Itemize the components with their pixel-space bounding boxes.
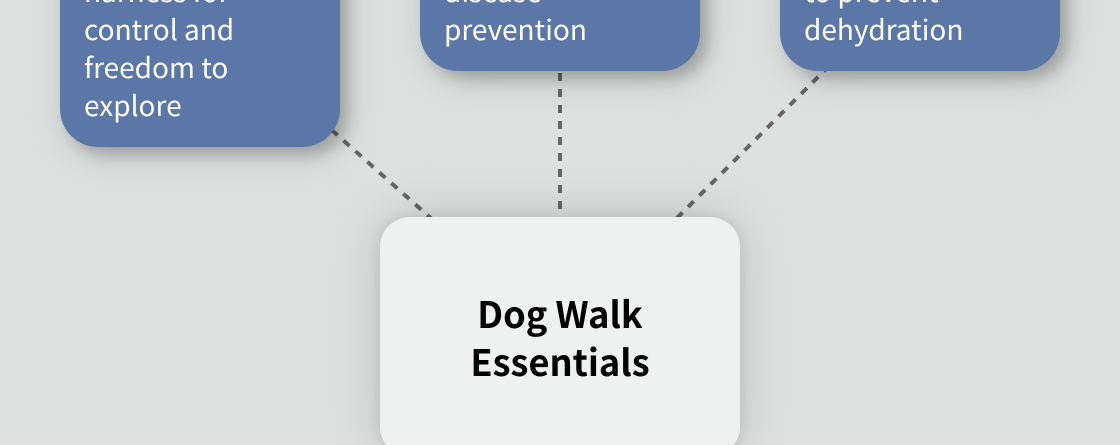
- text: harness description: [84, 0, 234, 125]
- text: harness description: freedom to: [84, 47, 228, 87]
- text: harness description: explore: [84, 85, 182, 125]
- panel: harness: [60, 0, 340, 147]
- title: [470, 287, 650, 387]
- text: disease prevention description: prevention: [444, 9, 587, 49]
- text: hydration description: dehydration: [804, 9, 963, 49]
- title: Essentials: [470, 335, 650, 387]
- title: Dog Walk: [477, 287, 643, 339]
- panel: central topic: [380, 217, 740, 445]
- panel: hydration: [780, 0, 1060, 71]
- panel: disease prevention: [420, 0, 700, 71]
- text: harness description: control and: [84, 9, 234, 49]
